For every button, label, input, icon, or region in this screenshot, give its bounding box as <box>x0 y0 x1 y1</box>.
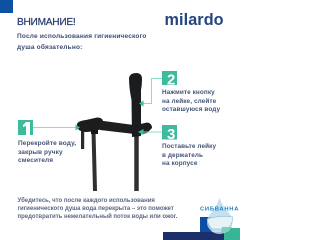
illustration: black shower mixer <box>77 73 152 191</box>
callout 1 text: закрыв ручку <box>18 149 63 156</box>
intro text: После использования гигиенического <box>17 33 147 40</box>
callout 2: green number and pointer: 2 <box>167 72 175 88</box>
bottom green accent <box>224 228 240 240</box>
hose right <box>134 135 139 191</box>
callout 3 text: в держатель <box>162 152 203 159</box>
callout 2 text <box>162 89 220 113</box>
handheld sprayer <box>129 73 142 137</box>
callout 1 text <box>18 140 76 164</box>
footer text: гигиенического душа вода перекрыта – это поможет <box>18 206 174 212</box>
footer text: предотвратить нежелательный поток воды или ожог. <box>18 214 177 220</box>
heading: ВНИМАНИЕ! <box>17 17 75 28</box>
logo: milardo: milardo <box>164 11 224 29</box>
mixer body <box>77 118 103 132</box>
logo: Сибванна badge: СИБВАННА <box>200 206 239 212</box>
footer text: Убедитесь, что после каждого использования <box>18 198 155 204</box>
footer text <box>18 197 177 220</box>
callout 1: green number and pointer <box>18 120 80 135</box>
callout 1 text: Перекройте воду, <box>18 140 76 147</box>
callout 3: green number and pointer <box>138 125 177 143</box>
intro text <box>17 33 147 51</box>
handle lever <box>81 126 84 149</box>
corner accent: blue square <box>0 0 13 13</box>
holder <box>132 122 152 136</box>
callout 2 text: на лейке, слейте <box>162 98 216 104</box>
bottom dark blue bar <box>163 232 240 240</box>
callout 3 text <box>162 143 216 167</box>
connector <box>91 130 98 134</box>
hose left <box>94 131 95 191</box>
callout 2 text: Нажмите кнопку <box>162 89 215 96</box>
intro text: душа обязательно: <box>17 44 82 51</box>
logo: Сибванна badge <box>200 198 239 234</box>
callout 3 text: Поставьте лейку <box>162 143 216 150</box>
callout 2: green number and pointer <box>139 71 177 106</box>
callout 2 text: оставшуюся воду <box>162 106 220 113</box>
callout 3 text: на корпусе <box>162 160 197 167</box>
callout 3: green number and pointer: 3 <box>167 126 175 143</box>
callout 1 text: смесителя <box>18 157 53 164</box>
horizontal arm <box>100 120 134 134</box>
